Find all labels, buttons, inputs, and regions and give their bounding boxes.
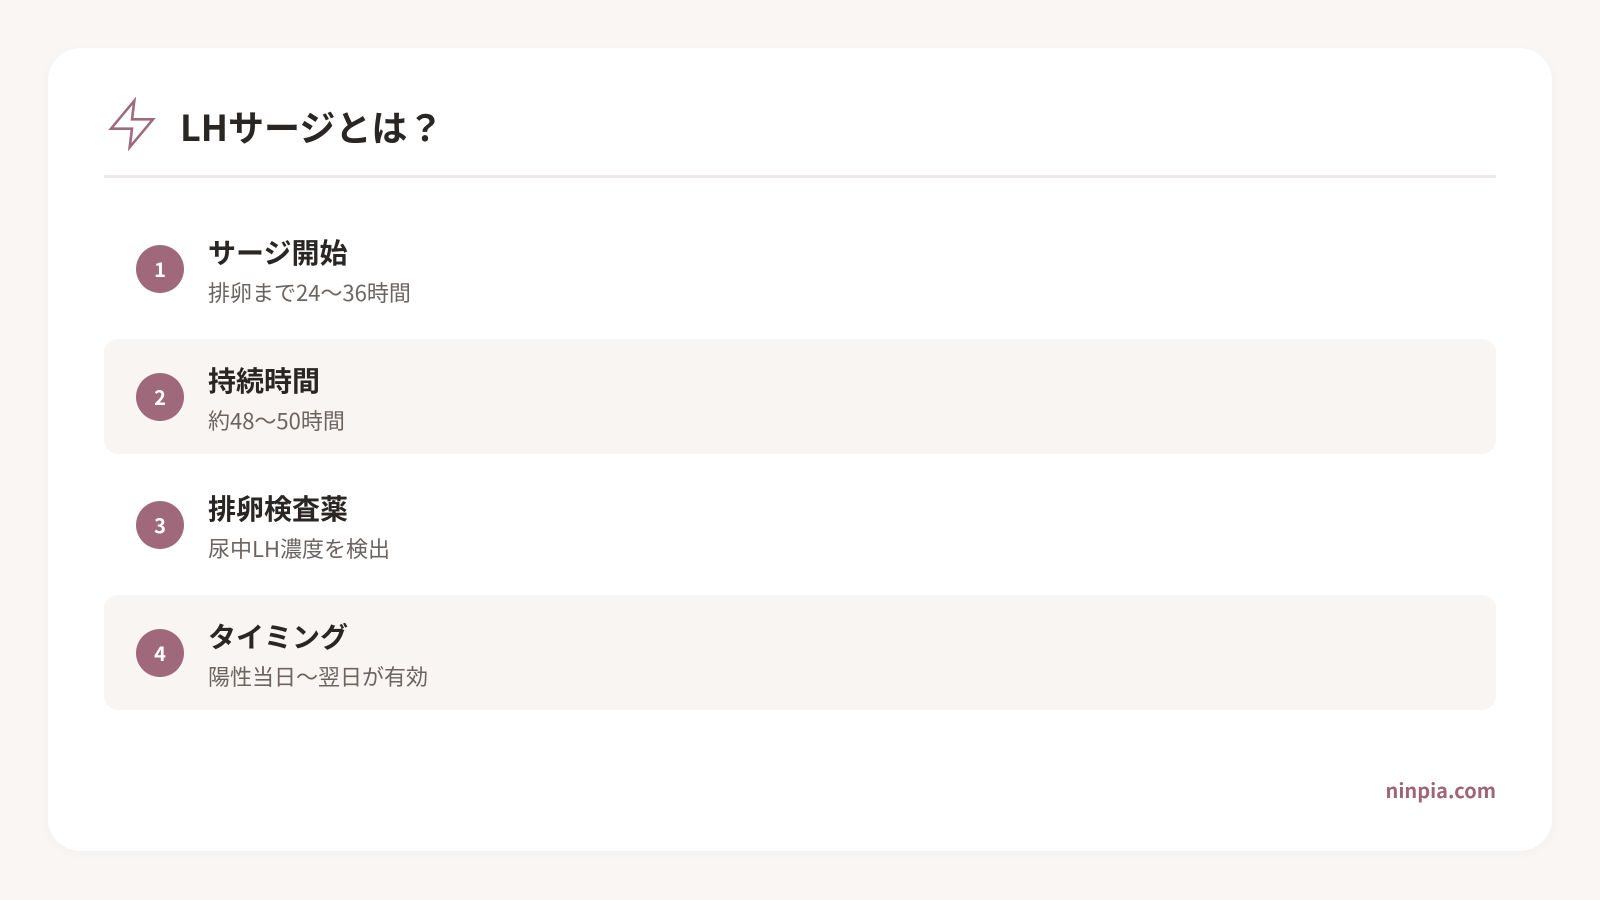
row 4 text: 陽性当日〜翌日が有効: [208, 660, 428, 692]
title: LHサージとは？: [180, 100, 443, 152]
row 3: [136, 488, 390, 564]
number badge 4: 4: [154, 638, 166, 667]
number badge 1: [136, 245, 184, 293]
row 2: [104, 339, 1496, 454]
row 4: [104, 595, 1496, 710]
row 2 text: 約48〜50時間: [208, 404, 345, 436]
number badge 4: [136, 629, 184, 677]
number badge 2: [136, 373, 184, 421]
row 1 text: 排卵まで24〜36時間: [208, 276, 411, 308]
row 3 heading: 排卵検査薬: [208, 488, 348, 528]
row 4 heading: タイミング: [208, 616, 348, 656]
number badge 1: 1: [154, 254, 166, 283]
number badge 2: 2: [154, 382, 166, 411]
row 1 heading: サージ開始: [208, 232, 347, 272]
footer source: ninpia.com: [1386, 775, 1496, 804]
number badge 3: 3: [154, 510, 166, 539]
row 1: [136, 232, 411, 308]
number badge 3: [136, 501, 184, 549]
row 3 text: 尿中LH濃度を検出: [208, 532, 390, 564]
icon: lightning: [108, 96, 156, 152]
row 2 heading: 持続時間: [208, 360, 320, 400]
